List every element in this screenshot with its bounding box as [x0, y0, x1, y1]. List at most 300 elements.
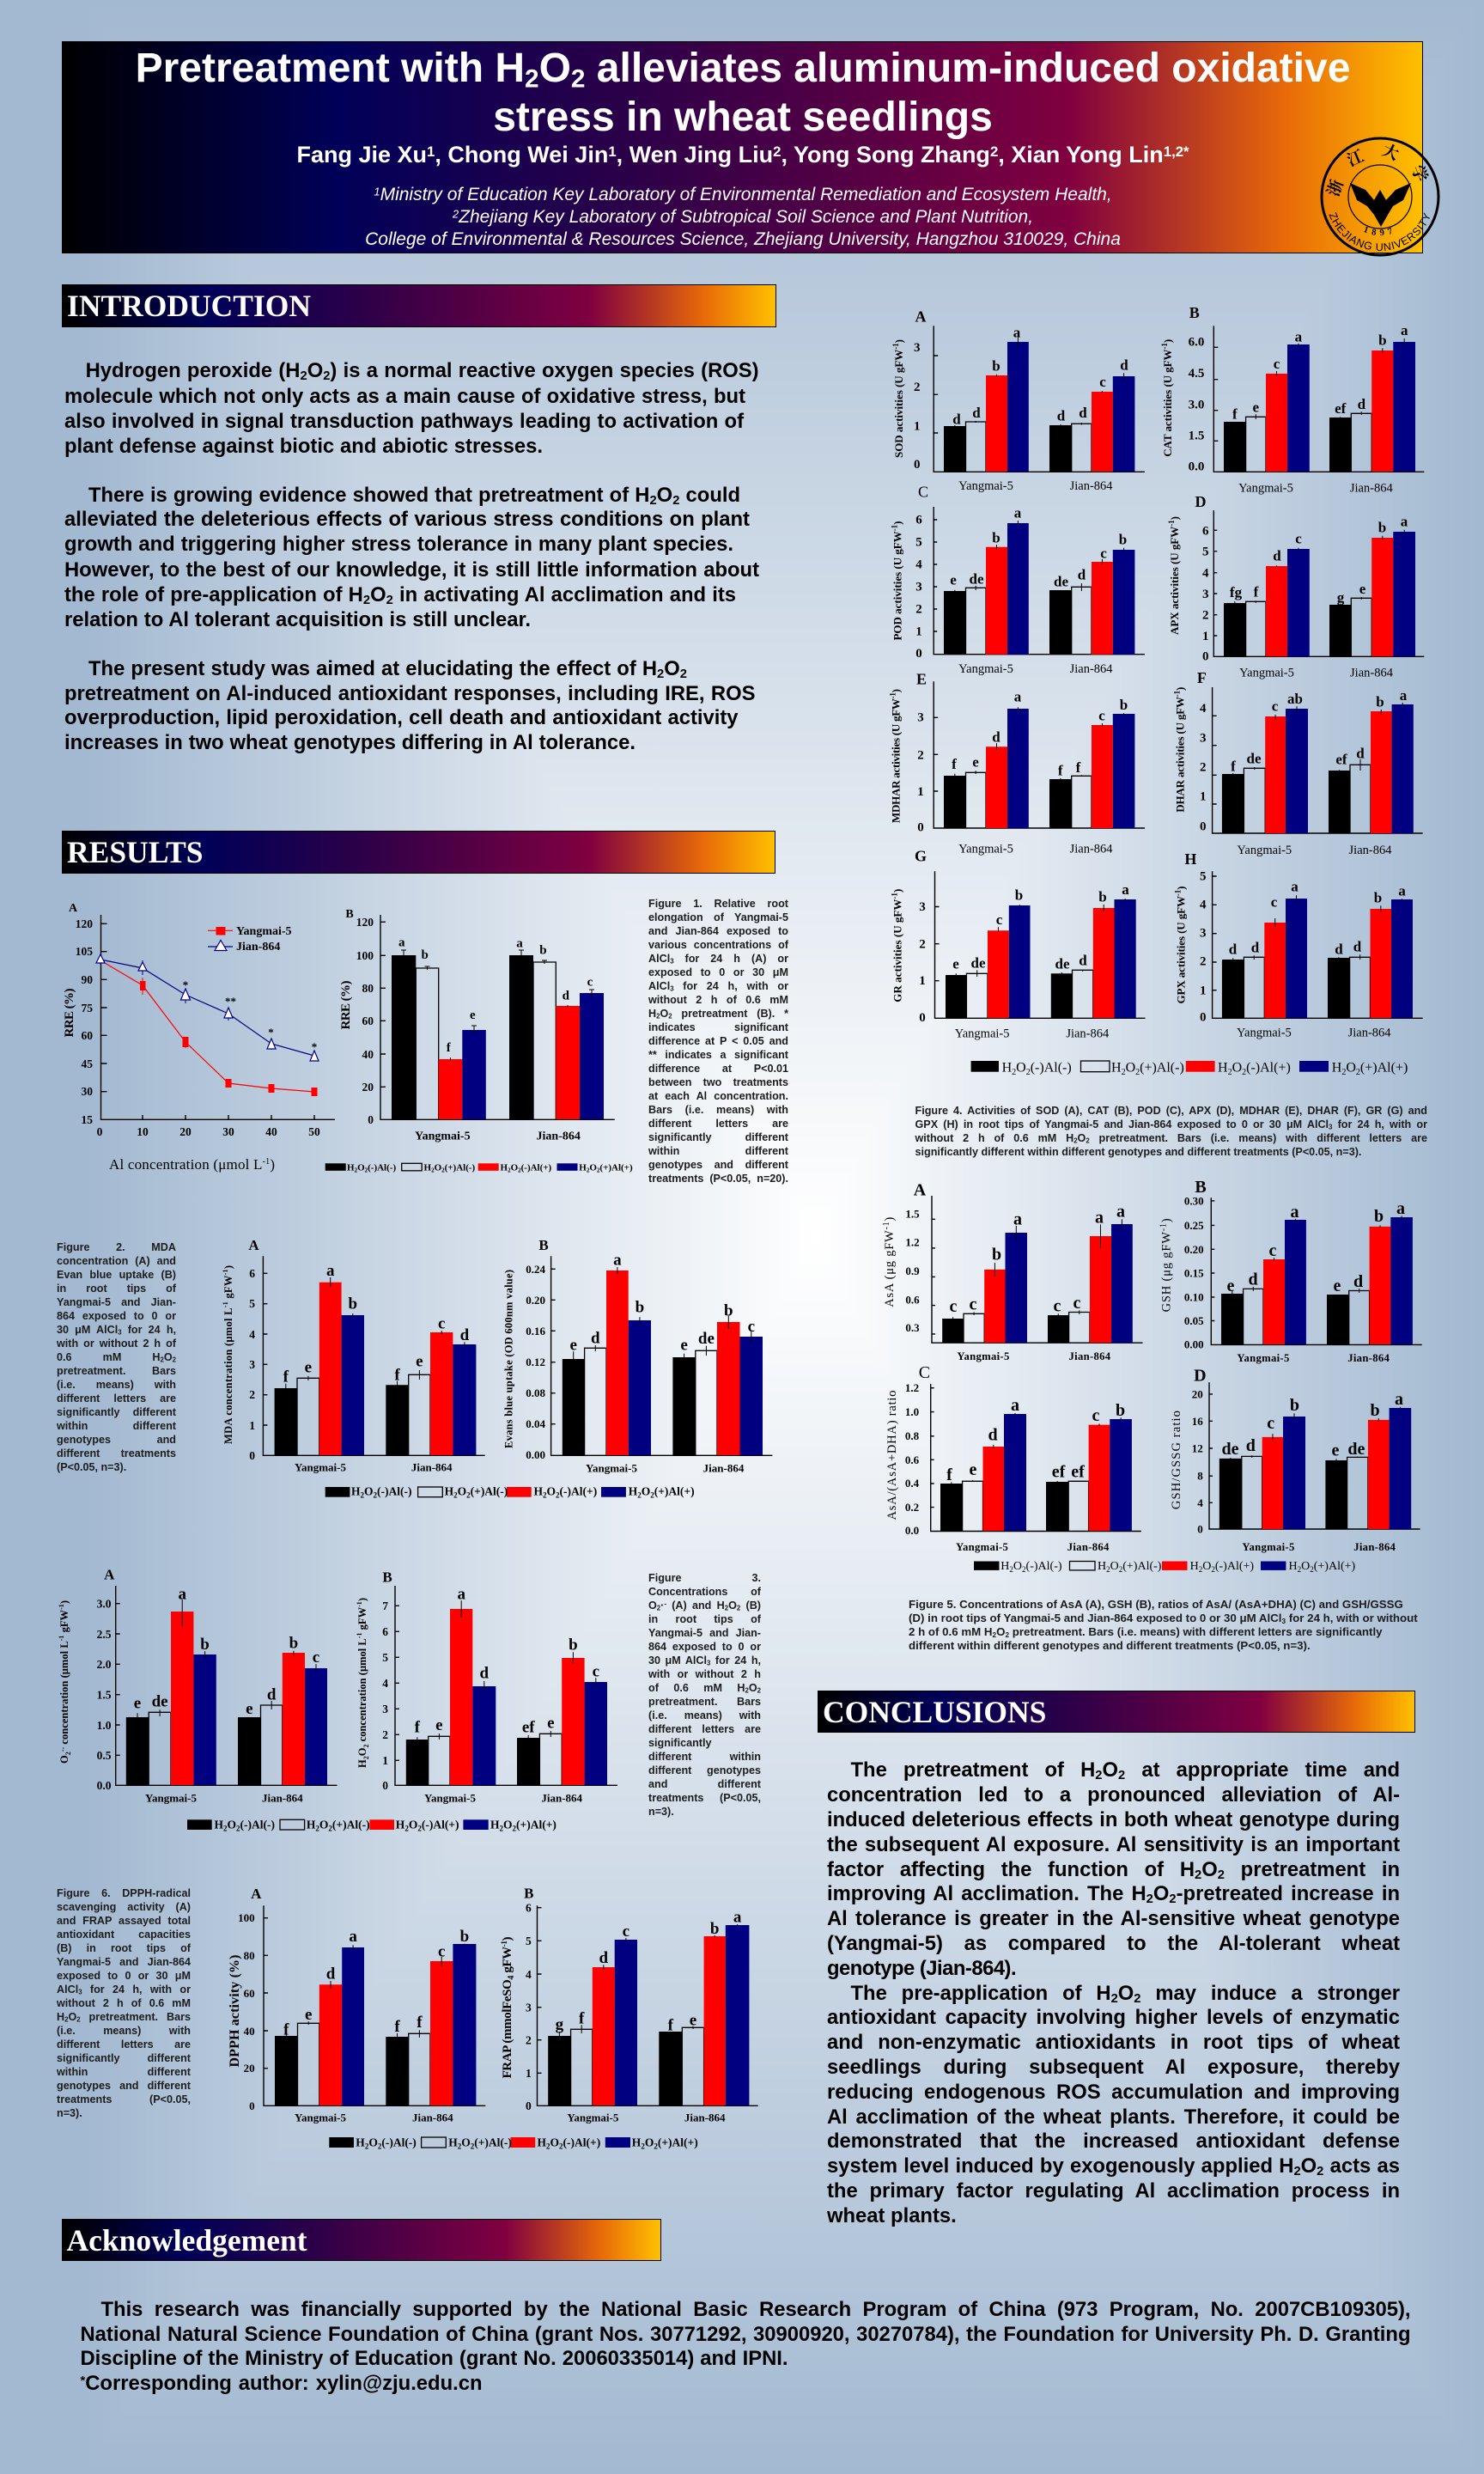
chart: figure 4C POD: 0: [915, 647, 922, 661]
chart: figure 4B CAT: 0.0: [1189, 460, 1204, 473]
caption: figure 1: at each Al concentration.: [648, 1090, 788, 1102]
chart: figure 4F DHAR: f: [1231, 758, 1236, 774]
chart: figure 5C AsA ratio: AsA/(AsA+DHA) ratio: [885, 1390, 899, 1520]
chart: figure 2B Evans blue: de: [698, 1330, 715, 1348]
chart: figure 4D APX: D: [1195, 493, 1206, 510]
caption: figure 4: significantly different within different genotypes and different treatments (P<0.05, n=3).: [915, 1146, 1361, 1158]
chart: figure 4A SOD: ): [892, 339, 905, 343]
chart: figure 2A MDA: 4: [249, 1328, 255, 1341]
chart: figure 4G GR: de: [970, 955, 986, 972]
chart: figure 6A DPPH: d: [326, 1965, 336, 1983]
legend: figure 2: 2: [361, 1491, 365, 1500]
text: induced deleterious effects in both wheat genotype during: [827, 1808, 1400, 1831]
chart: figure 4F DHAR: 1: [1200, 790, 1207, 804]
chart: figure 1B RRE bars: 60: [362, 1015, 374, 1027]
chart: figure 3B hydrogen peroxide: H: [356, 1759, 368, 1768]
chart: figure 4C POD: e: [950, 572, 957, 588]
caption: figure 3: treatments (P<0.05,: [648, 1792, 761, 1804]
legend: figure 5: [974, 1560, 1356, 1574]
chart: figure 2B Evans blue: e: [680, 1337, 688, 1355]
chart: figure 2A MDA: Jian-864: [411, 1461, 453, 1474]
chart: figure 5A AsA: c: [950, 1297, 958, 1316]
text: the role of pre-application of H2O2 in activating Al acclimation and its: [64, 583, 736, 607]
chart: figure 4E MDHAR: -1: [888, 692, 897, 698]
chart: figure 4B CAT: [1160, 304, 1424, 496]
chart: figure 4D APX: 6: [1202, 524, 1209, 538]
chart: figure 1B RRE bars: 40: [362, 1048, 374, 1061]
caption: figure 6: exposed to 0 or 30 μM: [57, 1970, 191, 1982]
text: wheat plants.: [827, 2204, 957, 2227]
chart: figure 4C POD: b: [1119, 531, 1127, 547]
chart: figure 4F DHAR: Yangmai-5: [1237, 844, 1292, 857]
title: Pretreatment with H2O2 alleviates aluminum-induced oxidative: [136, 46, 1350, 94]
legend: figure 3: (+)Al(-): [332, 1818, 370, 1831]
caption: figure 1: different letters are: [648, 1118, 788, 1130]
chart: figure 4G GR: 1: [919, 974, 926, 988]
chart: figure 4B CAT: Yangmai-5: [1238, 482, 1293, 496]
chart: figure 5A AsA: -1: [882, 1222, 891, 1230]
chart: figure 4F DHAR: 4: [1200, 702, 1207, 716]
caption: figure 5: [909, 1598, 1418, 1652]
chart: figure 3B hydrogen peroxide: concentration (μmol L: [356, 1638, 368, 1744]
chart: figure 3B hydrogen peroxide: 0: [382, 1779, 388, 1792]
chart: figure 4F DHAR: b: [1376, 694, 1384, 710]
legend: figure 6: H: [448, 2136, 458, 2148]
legend: figure 4: H: [1111, 1061, 1122, 1076]
text: National Natural Science Foundation of China (grant Nos. 30771292, 30900920, 30270784), the Foundation for University Ph. D. Granting: [81, 2323, 1410, 2346]
chart: figure 5C AsA ratio: 1.0: [905, 1405, 919, 1418]
chart: figure 4D APX: Jian-864: [1350, 666, 1394, 679]
legend: figure 1: (+)Al(-): [445, 1162, 476, 1173]
chart: figure 1A RRE line chart: RRE (%): [63, 988, 76, 1038]
chart: figure 1B RRE bars: 20: [362, 1081, 374, 1094]
text: There is growing evidence showed that pretreatment of H2O2 could: [88, 484, 740, 509]
chart: figure 4H GPX: 4: [1200, 898, 1207, 911]
chart: figure 1A RRE line chart: 120: [76, 917, 93, 930]
chart: figure 5C AsA ratio: 0.0: [905, 1524, 919, 1537]
caption: figure 5: (D) in root tips of Yangmai-5 and Jian-864 exposed to 0 or 30 μM AlCl3 for 24 h, with or without: [909, 1612, 1418, 1625]
legend: figure 2: 2: [637, 1491, 642, 1500]
affiliations: 1Ministry of Education Key Laboratory of Environmental Remediation and Ecosystem Health,: [374, 185, 1112, 204]
chart: figure 5D GSH/GSSG ratio: e: [1332, 1441, 1340, 1459]
chart: figure 2A MDA: a: [326, 1262, 335, 1280]
legend: figure 1: H: [347, 1162, 355, 1173]
chart: figure 4H GPX: H: [1184, 850, 1196, 868]
legend: figure 5: O: [1013, 1560, 1022, 1573]
chart: figure 1A RRE line chart: 30: [81, 1085, 93, 1098]
chart: figure 1B RRE bars: a: [516, 937, 523, 951]
caption: figure 1: ** indicates a significant: [648, 1049, 788, 1061]
chart: figure 3A superoxide: 2: [64, 1752, 72, 1755]
legend: figure 3: 2: [417, 1824, 422, 1832]
caption: figure 3: in root tips of: [648, 1613, 761, 1625]
chart: figure 4D APX: 4: [1202, 567, 1209, 581]
legend: figure 2: O: [364, 1485, 374, 1498]
chart: figure 4D APX: ): [1168, 516, 1181, 520]
chart: figure 6A DPPH: e: [305, 2006, 312, 2024]
chart: figure 6A DPPH: f: [283, 2020, 289, 2038]
legend: figure 6: O: [550, 2136, 559, 2148]
legend: figure 2: H: [629, 1485, 637, 1498]
chart: figure 1B RRE bars: 100: [356, 949, 374, 962]
chart: figure 4C POD: 1: [915, 625, 922, 638]
chart: figure 2A MDA: -1: [222, 1269, 229, 1275]
chart: figure 5A AsA: Jian-864: [1069, 1350, 1111, 1362]
chart: figure 2A MDA: 3: [249, 1358, 255, 1371]
legend: figure 6: 2: [365, 2142, 369, 2150]
chart: figure 3A superoxide: ·-: [59, 1747, 67, 1752]
legend: figure 5: (+)Al(+): [1314, 1560, 1356, 1573]
heading: results: RESULTS: [67, 835, 204, 869]
chart: figure 4F DHAR: 3: [1200, 732, 1207, 746]
chart: figure 1B RRE bars: d: [563, 989, 570, 1002]
caption: figure 1: exposed to 0 or 30 μM: [648, 966, 788, 978]
chart: figure 5D GSH/GSSG ratio: a: [1395, 1390, 1403, 1409]
chart: figure 3B hydrogen peroxide: b: [569, 1636, 578, 1654]
legend: figure 4: 2: [1012, 1068, 1016, 1077]
chart: figure 5A AsA: [882, 1180, 1142, 1362]
text: demonstrated that the increased antioxidant defense: [827, 2130, 1400, 2153]
legend: figure 6: [329, 2136, 698, 2150]
legend: figure 4: 2: [1228, 1068, 1232, 1077]
chart: figure 6A DPPH: 40: [244, 2025, 255, 2038]
chart: figure 1B RRE bars: 120: [356, 916, 374, 929]
chart: figure 5D GSH/GSSG ratio: 8: [1197, 1470, 1203, 1483]
text: factor affecting the function of H2O2 pretreatment in: [827, 1858, 1400, 1883]
chart: figure 3B hydrogen peroxide: [356, 1569, 617, 1804]
chart: figure 4D APX: a: [1401, 514, 1408, 530]
chart: figure 4G GR: c: [996, 911, 1003, 928]
legend: figure 6: H: [632, 2136, 641, 2148]
legend: figure 6: 2: [546, 2142, 550, 2150]
chart: figure 2B Evans blue: Jian-864: [703, 1461, 745, 1474]
legend: figure 6: 2: [458, 2142, 462, 2150]
legend: figure 3: (-)Al(-): [240, 1818, 275, 1831]
legend: figure 5: O: [1202, 1560, 1211, 1573]
chart: figure 5A AsA: c: [1073, 1294, 1081, 1313]
chart: figure 5A AsA: A: [914, 1180, 927, 1199]
chart: figure 5C AsA ratio: [885, 1363, 1141, 1553]
legend: figure 3: H: [307, 1818, 315, 1831]
chart: figure 3B hydrogen peroxide: ef: [522, 1719, 535, 1737]
chart: figure 3B hydrogen peroxide: a: [457, 1586, 465, 1604]
chart: figure 4E MDHAR: MDHAR activities (U gFW: [890, 698, 902, 823]
chart: figure 4A SOD: d: [972, 405, 981, 421]
chart: figure 5D GSH/GSSG ratio: b: [1370, 1401, 1380, 1420]
chart: figure 4G GR: e: [952, 956, 959, 972]
chart: figure 2B Evans blue: 0.04: [526, 1417, 546, 1430]
legend: figure 3: 2: [513, 1824, 517, 1832]
legend: figure 4: 2: [1356, 1068, 1360, 1077]
chart: figure 4F DHAR: 2: [1200, 761, 1207, 775]
chart: figure 4B CAT: ): [1161, 339, 1174, 343]
chart: figure 2A MDA: f: [283, 1368, 289, 1386]
chart: figure 3A superoxide: c: [313, 1648, 319, 1667]
chart: figure 2B Evans blue: [503, 1237, 772, 1474]
text: This research was financially supported by the National Basic Research Program of China (973 Program, No. 2007CB109305),: [101, 2298, 1410, 2321]
chart: figure 4H GPX: a: [1398, 882, 1406, 899]
chart: figure 4E MDHAR: e: [972, 753, 979, 770]
caption: figure 2: with or without 2 h of: [57, 1338, 176, 1350]
chart: figure 6B FRAP: 6: [526, 1902, 532, 1914]
chart: figure 4A SOD: d: [1120, 357, 1128, 374]
chart: figure 5B GSH: a: [1290, 1203, 1298, 1222]
affiliations: College of Environmental & Resources Science, Zhejiang University, Hangzhou 310029, China: [365, 229, 1121, 249]
chart: figure 5B GSH: d: [1248, 1271, 1258, 1289]
caption: figure 1: genotypes and different: [648, 1159, 788, 1171]
chart: figure 5D GSH/GSSG ratio: 12: [1192, 1441, 1203, 1455]
chart: figure 6A DPPH: c: [438, 1942, 445, 1960]
caption: figure 3: O2·- (A) and H2O2 (B): [648, 1600, 761, 1612]
chart: figure 1A RRE line chart: 90: [81, 973, 93, 986]
chart: figure 2A MDA: 0: [249, 1449, 255, 1462]
chart: figure 1B RRE bars: [339, 908, 615, 1143]
caption: figure 1: without 2 h of 0.6 mM: [648, 994, 788, 1006]
chart: figure 4B CAT: 1.5: [1189, 430, 1204, 443]
chart: figure 4H GPX: 1: [1200, 984, 1207, 997]
chart: figure 1B RRE bars: f: [447, 1041, 452, 1055]
caption: figure 1: [648, 898, 788, 1185]
chart: figure 3A superoxide: -1: [58, 1604, 65, 1610]
legend: figure 4: (-)Al(+): [1246, 1061, 1291, 1076]
chart: figure 4F DHAR: Jian-864: [1349, 844, 1392, 857]
chart: figure 2B Evans blue: Yangmai-5: [586, 1461, 637, 1474]
legend: figure 6: H: [538, 2136, 546, 2148]
chart: figure 5C AsA ratio: C: [919, 1363, 930, 1382]
chart: figure 2B Evans blue: d: [591, 1329, 600, 1347]
chart: figure 5D GSH/GSSG ratio: 4: [1197, 1496, 1203, 1509]
legend: figure 2: O: [547, 1485, 556, 1498]
chart: figure 5C AsA ratio: e: [970, 1460, 977, 1479]
caption: figure 3: of 0.6 mM H2O2: [648, 1682, 761, 1695]
chart: figure 4H GPX: GPX activities (U gFW: [1175, 896, 1188, 1003]
chart: figure 4E MDHAR: b: [1120, 697, 1128, 713]
legend: figure 4: 2: [1242, 1068, 1246, 1077]
caption: figure 1: various concentrations of: [648, 939, 788, 951]
chart: figure 6B FRAP: B: [524, 1885, 533, 1901]
caption: figure 3: different letters are different within: [648, 1723, 761, 1763]
chart: figure 6A DPPH: 0: [249, 2099, 255, 2112]
caption: figure 3: 30 μM AlCl3 for 24 h,: [648, 1654, 761, 1667]
caption: figure 3: and different: [648, 1778, 761, 1790]
chart: figure 1A RRE line chart: 15: [81, 1113, 93, 1126]
chart: figure 4G GR: -1: [891, 893, 899, 899]
chart: figure 6B FRAP: d: [599, 1949, 609, 1967]
caption: figure 6: (i.e. means) with: [57, 2025, 191, 2037]
chart: figure 4E MDHAR: [888, 671, 1145, 856]
chart: figure 4E MDHAR: d: [992, 728, 1000, 745]
legend: figure 2: H: [534, 1485, 543, 1498]
chart: figure 1A RRE line chart: **: [225, 995, 236, 1008]
chart: figure 5C AsA ratio: Jian-864: [1067, 1541, 1110, 1553]
chart: figure 1B RRE bars: Jian-864: [537, 1130, 581, 1143]
chart: figure 3A superoxide: 3.0: [97, 1598, 112, 1610]
legend: figure 3: H: [215, 1818, 223, 1831]
chart: figure 1B RRE bars: b: [539, 944, 547, 958]
caption: figure 1: elongation of Yangmai-5: [648, 911, 788, 923]
chart: figure 4B CAT: c: [1274, 356, 1280, 372]
chart: figure 4D APX: e: [1359, 581, 1366, 597]
chart: figure 6A DPPH: f: [417, 2014, 423, 2032]
chart: figure 4F DHAR: -1: [1172, 690, 1181, 697]
chart: figure 4F DHAR: [1172, 669, 1423, 857]
text: Discipline of the Ministry of Education (grant No. 20060335014) and IPNI.: [81, 2347, 788, 2370]
chart: figure 4G GR: b: [1098, 888, 1107, 905]
chart: figure 5A AsA: 0.6: [905, 1294, 920, 1306]
legend: figure 3: 2: [500, 1824, 504, 1832]
caption: figure 3: pretreatment. Bars: [648, 1696, 761, 1708]
chart: figure 4H GPX: b: [1374, 890, 1382, 906]
chart: figure 1A RRE line chart: 40: [265, 1125, 277, 1138]
legend: figure 2: 2: [466, 1491, 471, 1500]
chart: figure 5A AsA: 0.3: [905, 1321, 920, 1334]
chart: figure 2B Evans blue: 0.16: [526, 1325, 546, 1338]
legend: figure 2: O: [642, 1485, 650, 1498]
caption: figure 3: with or without 2 h: [648, 1668, 761, 1680]
chart: figure 5B GSH: GSH (μg gFW: [1159, 1232, 1173, 1312]
caption: figure 1: Bars (i.e. means) with: [648, 1104, 788, 1116]
chart: figure 5B GSH: b: [1374, 1207, 1384, 1226]
caption: figure 1: and Jian-864 exposed to: [648, 925, 788, 937]
chart: figure 5A AsA: AsA (μg gFW: [883, 1230, 897, 1307]
legend: figure 1: 2: [518, 1167, 521, 1173]
chart: figure 2A MDA: f: [394, 1367, 400, 1385]
legend: figure 5: 2: [1298, 1565, 1301, 1574]
caption: figure 2: within different: [57, 1420, 176, 1432]
header banner: [62, 41, 1423, 253]
caption: figure 6: different letters are: [57, 2038, 191, 2050]
chart: figure 1B RRE bars: b: [422, 948, 429, 962]
icon: Zhejiang University seal: ZHEJIANG UNIVERSITY: [1329, 212, 1430, 251]
caption: figure 6: H2O2 pretreatment. Bars: [57, 2011, 191, 2024]
caption: figure 6: scavenging activity (A): [57, 1901, 191, 1913]
legend: figure 2: (+)Al(-): [471, 1485, 508, 1498]
chart: figure 2A MDA: gFW: [222, 1275, 234, 1301]
text: system level induced by exogenously applied H2O2 acts as: [827, 2154, 1400, 2179]
chart: figure 1A RRE line chart: 30: [222, 1125, 234, 1138]
chart: figure 4E MDHAR: 1: [917, 785, 924, 799]
chart: figure 4B CAT: 4.5: [1189, 367, 1204, 381]
chart: figure 2A MDA: [222, 1237, 485, 1474]
legend: figure 3: 2: [236, 1824, 240, 1832]
legend: figure 4: O: [1346, 1061, 1356, 1076]
text: improving Al acclimation. The H2O2-pretreated increase in: [827, 1882, 1400, 1907]
legend: figure 5: 2: [1119, 1565, 1122, 1574]
chart: figure 4E MDHAR: a: [1014, 689, 1022, 705]
chart: figure 6A DPPH: A: [251, 1886, 262, 1902]
chart: figure 5D GSH/GSSG ratio: [1170, 1366, 1420, 1553]
text: and non-enzymatic antioxidants in root tips of wheat: [827, 2031, 1400, 2054]
legend: figure 2: 2: [650, 1491, 654, 1500]
chart: figure 4C POD: [891, 483, 1145, 676]
chart: figure 2B Evans blue: c: [748, 1318, 755, 1336]
chart: figure 4B CAT: B: [1189, 304, 1200, 321]
chart: figure 6A DPPH: [228, 1886, 485, 2124]
legend: figure 4: (-)Al(-): [1031, 1061, 1072, 1076]
chart: figure 1B RRE bars: c: [587, 975, 593, 989]
caption: figure 3: significantly: [648, 1737, 711, 1749]
chart: figure 3A superoxide: -1: [58, 1636, 65, 1641]
legend: figure 5: 2: [1022, 1565, 1026, 1574]
text: reducing endogenous ROS accumulation and improving: [827, 2081, 1400, 2104]
chart: figure 5D GSH/GSSG ratio: de: [1221, 1440, 1239, 1459]
chart: figure 4H GPX: 5: [1200, 869, 1207, 883]
chart: figure 1A RRE line chart: Al concentration (μmol L: [109, 1156, 262, 1173]
text: Al acclimation of the wheat plants. Therefore, it could be: [827, 2105, 1400, 2129]
text: plant defense against biotic and abiotic stresses.: [64, 435, 543, 458]
chart: figure 2A MDA: e: [305, 1358, 312, 1376]
chart: figure 1A RRE line chart: *: [183, 978, 188, 991]
chart: figure 3A superoxide: Yangmai-5: [145, 1791, 197, 1804]
chart: figure 1B RRE bars: e: [470, 1008, 476, 1022]
text: seedlings during subsequent Al exposure, thereby: [827, 2056, 1400, 2079]
legend: figure 6: O: [645, 2136, 654, 2148]
legend: figure 4: O: [1232, 1061, 1242, 1076]
chart: figure 3A superoxide: A: [104, 1566, 115, 1582]
chart: figure 4G GR: 3: [919, 900, 926, 914]
chart: figure 6B FRAP: f: [668, 2016, 674, 2034]
chart: figure 5D GSH/GSSG ratio: d: [1246, 1436, 1256, 1455]
chart: figure 1B RRE bars: a: [398, 936, 405, 950]
legend: figure 5: O: [1110, 1560, 1119, 1573]
chart: figure 4E MDHAR: ): [890, 689, 902, 692]
chart: figure 3A superoxide: a: [178, 1586, 186, 1604]
legend: figure 3: (+)Al(+): [516, 1818, 556, 1831]
chart: figure 6B FRAP: a: [733, 1908, 742, 1926]
chart: figure 6A DPPH: Jian-864: [412, 2111, 453, 2124]
caption: figure 1: H2O2 pretreatment (B). *: [648, 1008, 788, 1021]
chart: figure 1B RRE bars: 80: [362, 982, 374, 995]
chart: figure 4A SOD: b: [992, 358, 1000, 375]
text: However, to the best of our knowledge, it is still little information about: [64, 558, 759, 582]
caption: figure 5: 2 h of 0.6 mM H2O2 pretreatment. Bars (i.e. means) with different letters are significantly: [909, 1625, 1383, 1639]
chart: figure 5B GSH: c: [1269, 1241, 1277, 1260]
legend: figure 5: 2: [1106, 1565, 1110, 1574]
chart: figure 5D GSH/GSSG ratio: 0: [1197, 1522, 1203, 1536]
chart: figure 1A RRE line chart: 60: [81, 1029, 93, 1042]
chart: figure 5B GSH: d: [1353, 1272, 1363, 1291]
text: genotype (Jian-864).: [827, 1957, 1016, 1980]
chart: figure 2B Evans blue: 0.20: [526, 1294, 545, 1307]
chart: figure 4C POD: d: [1078, 566, 1086, 582]
chart: figure 1A RRE line chart: *: [312, 1040, 317, 1053]
chart: figure 2B Evans blue: a: [613, 1252, 622, 1270]
text: relation to Al tolerant acquisition is still unclear.: [64, 608, 531, 631]
caption: figure 4: [915, 1105, 1427, 1158]
caption: figure 1: treatments (P<0.05, n=20).: [648, 1173, 788, 1185]
legend: figure 5: 2: [1199, 1565, 1202, 1574]
caption: figure 4: GPX (H) in root tips of Yangmai-5 and Jian-864 exposed to 0 or 30 μM AlCl3 for 24 h, with or: [915, 1118, 1427, 1131]
chart: figure 5D GSH/GSSG ratio: Yangmai-5: [1242, 1541, 1295, 1553]
chart: figure 6B FRAP: 0: [526, 2099, 532, 2112]
chart: figure 4C POD: ): [891, 521, 904, 525]
chart: figure 5D GSH/GSSG ratio: 16: [1192, 1415, 1203, 1428]
caption: figure 2: concentration (A) and: [57, 1255, 176, 1267]
text: alleviated the deleterious effects of various stress conditions on plant: [64, 508, 750, 531]
chart: figure 4A SOD: A: [915, 308, 926, 325]
chart: figure 4B CAT: e: [1253, 399, 1260, 415]
legend: figure 2: H: [351, 1485, 361, 1498]
caption: figure 5: different within different genotypes and different treatments (P<0.05, n=3).: [909, 1639, 1311, 1652]
chart: figure 3A superoxide: b: [200, 1636, 210, 1654]
title: [136, 46, 1350, 139]
caption: figure 6: antioxidant capacities: [57, 1929, 191, 1941]
caption: figure 6: AlCl3 for 24 h, with or: [57, 1983, 191, 1996]
chart: figure 4B CAT: -1: [1160, 343, 1169, 350]
chart: figure 4A SOD: 1: [914, 420, 920, 434]
chart: figure 4H GPX: a: [1291, 879, 1298, 895]
chart: figure 4F DHAR: 0: [1200, 820, 1207, 834]
